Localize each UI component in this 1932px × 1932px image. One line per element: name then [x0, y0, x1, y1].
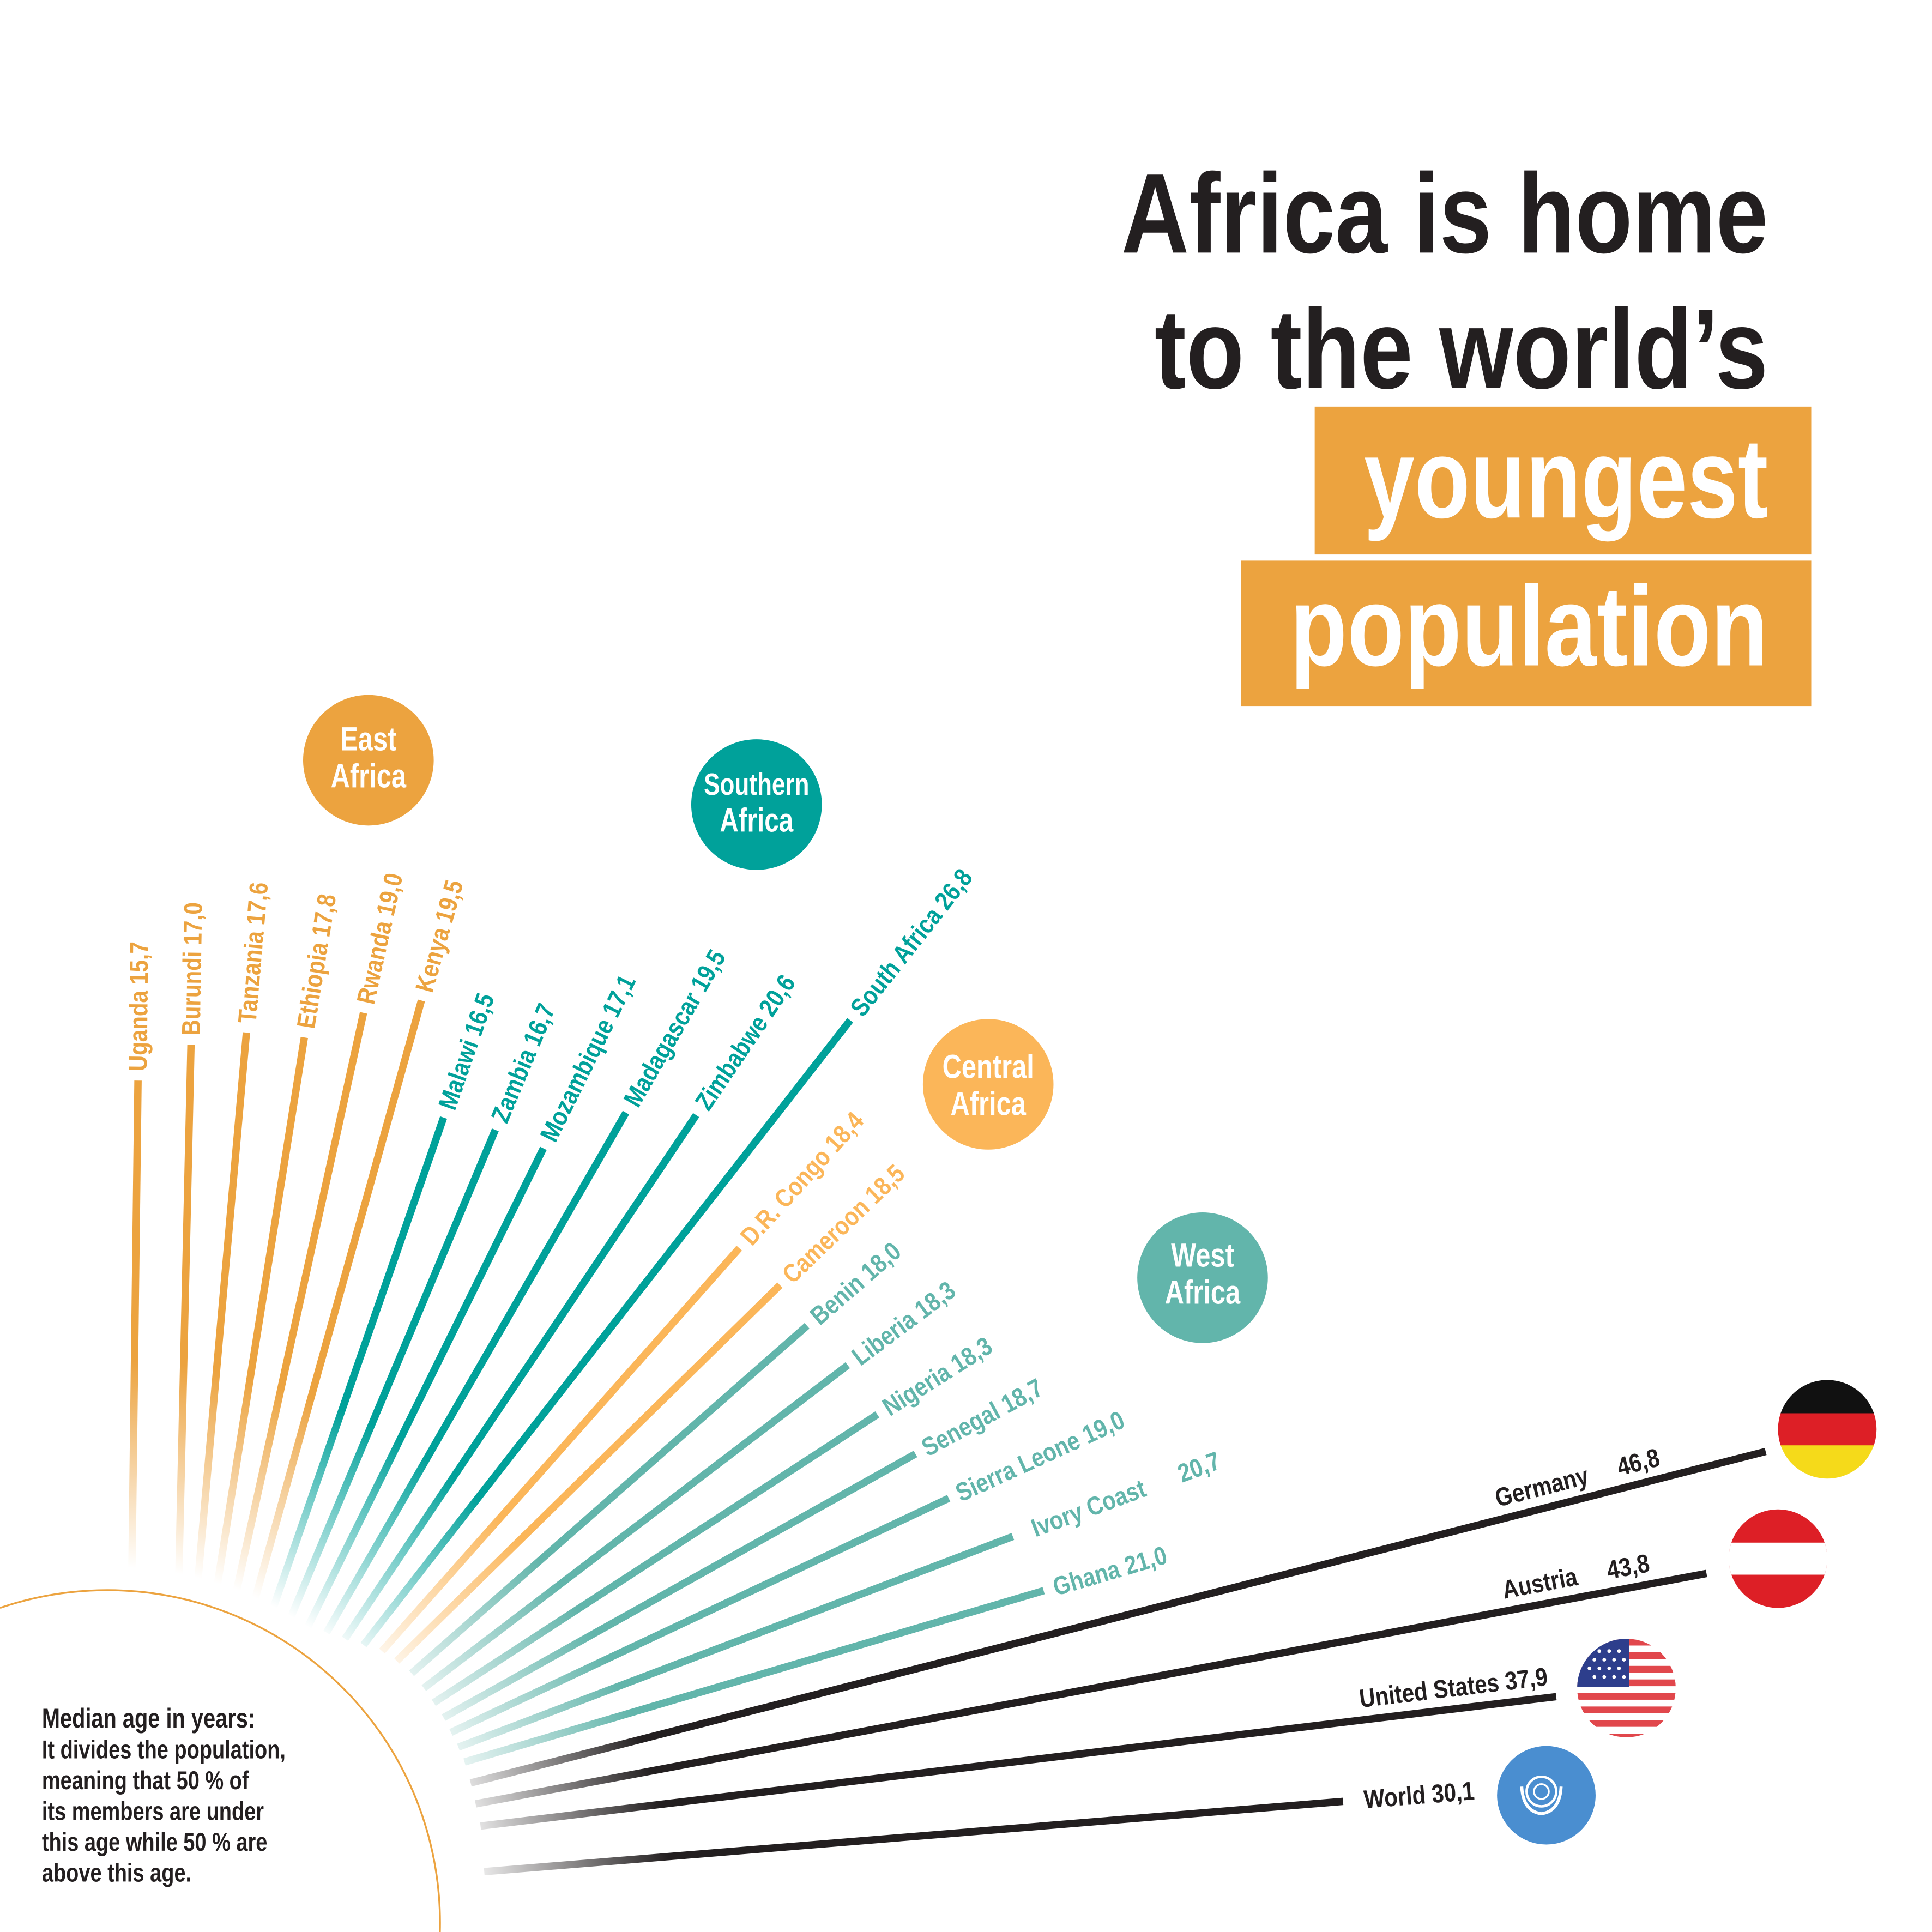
- title: Africa is home: [1121, 150, 1768, 277]
- flag: Austria: [1729, 1509, 1827, 1608]
- title: youngest: [1364, 415, 1768, 542]
- country labels: Burundi 17,0: [177, 902, 208, 1036]
- country labels: Liberia 18,3: [847, 1276, 961, 1371]
- region: East Africa: [303, 695, 434, 825]
- region: Southern Africa: Southern: [704, 767, 809, 801]
- fade overlay: [0, 1232, 862, 1932]
- region: Central Africa: Africa: [951, 1085, 1027, 1122]
- title: [1121, 150, 1811, 706]
- country labels: Nigeria 18,3: [878, 1331, 997, 1422]
- country labels: Malawi 16,5: [433, 989, 500, 1113]
- explanation text: Median age in years:: [42, 1703, 255, 1734]
- country labels: World 30,1: [1363, 1777, 1476, 1814]
- country labels: Mozambique 17,1: [535, 970, 642, 1146]
- region: East Africa: East: [340, 720, 396, 758]
- explanation text: above this age.: [42, 1858, 191, 1887]
- country labels: Madagascar 19,5: [618, 945, 732, 1112]
- country labels: Zambia 16,7: [486, 1000, 561, 1127]
- fan chart lines: [132, 1000, 1766, 1871]
- country labels: Cameroon 18,5: [777, 1159, 910, 1289]
- explanation text: It divides the population,: [42, 1735, 286, 1764]
- explanation text: this age while 50 % are: [42, 1828, 267, 1857]
- country labels: Benin 18,0: [805, 1237, 907, 1331]
- country labels: Sierra Leone 19,0: [951, 1405, 1129, 1507]
- explanation text: [42, 1703, 286, 1887]
- country labels: Zimbabwe 20,6: [690, 970, 801, 1115]
- country labels: [124, 864, 1663, 1814]
- explanation text: meaning that 50 % of: [42, 1766, 249, 1795]
- country labels: Kenya 19,5: [410, 877, 469, 995]
- country labels: Senegal 18,7: [917, 1373, 1048, 1462]
- base arc: [0, 1590, 440, 1932]
- country labels: Rwanda 19,0: [352, 871, 408, 1007]
- region: Southern Africa: Africa: [720, 801, 794, 839]
- country labels: South Africa 26,8: [845, 864, 978, 1022]
- country labels: Germany 46,8: [1492, 1443, 1663, 1513]
- country labels: United States 37,9: [1358, 1662, 1549, 1713]
- country labels: Austria 43,8: [1500, 1549, 1652, 1604]
- region: Central Africa: [923, 1019, 1053, 1150]
- region: West Africa: [1137, 1212, 1268, 1343]
- country labels: Tanzania 17,6: [233, 881, 274, 1024]
- region: Southern Africa: [691, 739, 822, 870]
- country labels: D.R. Congo 18,4: [735, 1106, 870, 1251]
- country labels: Ethiopia 17,8: [292, 892, 342, 1030]
- title: to the world’s: [1155, 286, 1768, 413]
- title: population: [1290, 564, 1768, 690]
- explanation text: its members are under: [42, 1797, 264, 1826]
- country labels: Uganda 15,7: [124, 941, 154, 1071]
- region: East Africa: Africa: [331, 757, 407, 795]
- country labels: Ghana 21,0: [1049, 1541, 1170, 1602]
- flag: United States: [1577, 1639, 1676, 1737]
- country labels: Ivory Coast 20,7: [1028, 1446, 1224, 1543]
- region: Central Africa: Central: [943, 1048, 1034, 1085]
- flag: United Nations: [1497, 1746, 1596, 1845]
- region: West Africa: West: [1171, 1236, 1234, 1274]
- flag: Germany: [1778, 1380, 1876, 1478]
- region: West Africa: Africa: [1165, 1273, 1241, 1311]
